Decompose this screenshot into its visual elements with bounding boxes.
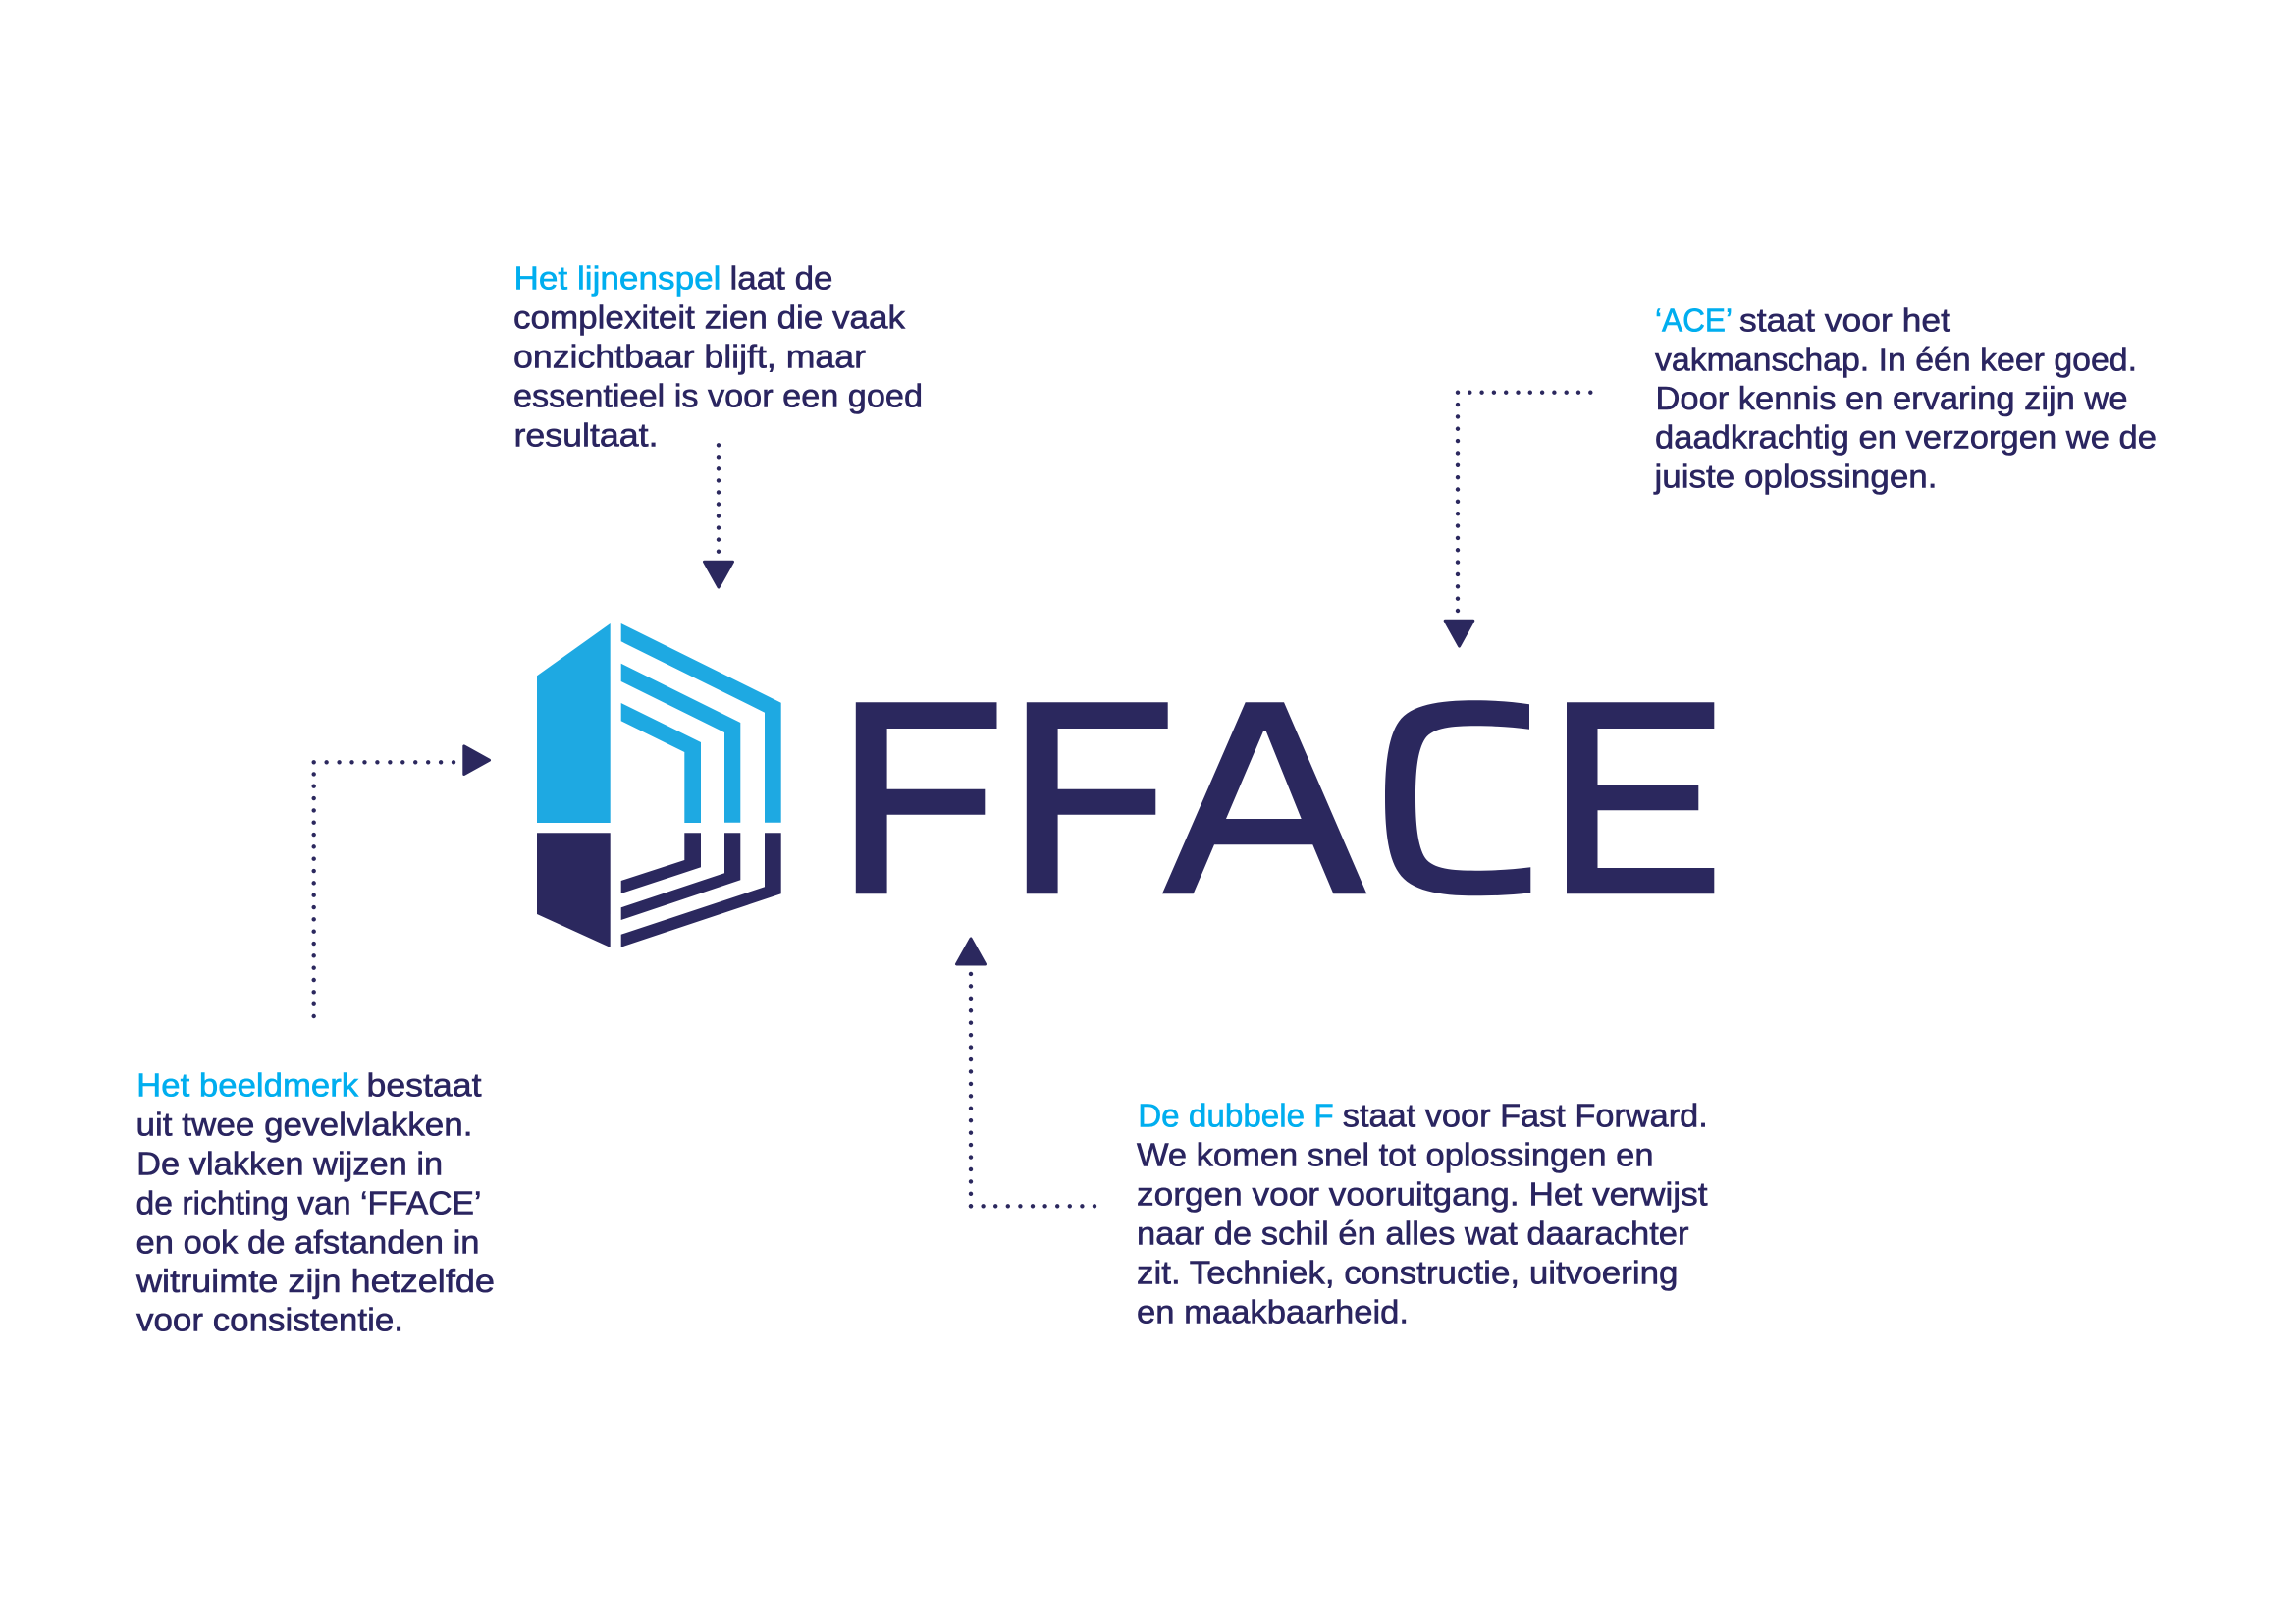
text block: Het lijnenspel: onzichtbaar blijft, maar xyxy=(513,340,866,376)
letter F xyxy=(856,702,997,893)
text block: De dubbele F xyxy=(1137,1099,1708,1330)
arrow: dubbele F to wordmark xyxy=(956,939,1095,1206)
text block: Het lijnenspel: Het lijnenspel xyxy=(514,261,721,298)
light line inner xyxy=(621,703,701,823)
letter E xyxy=(1567,702,1714,893)
light line middle xyxy=(621,664,740,823)
light line outer xyxy=(621,623,781,823)
logo: FFACE xyxy=(537,623,1714,947)
arrow: ACE to wordmark xyxy=(1445,393,1590,646)
wordmark: FFACE letter shapes xyxy=(856,700,1714,895)
icon: building mark xyxy=(537,623,781,947)
text block: ACE: ‘ACE’ xyxy=(1655,302,1733,339)
dark line inner xyxy=(621,833,701,893)
text block: De dubbele F: We komen snel tot oplossingen en xyxy=(1137,1138,1653,1174)
text block: De dubbele F: naar de schil én alles wat daarachter xyxy=(1137,1217,1688,1253)
text block: De dubbele F: staat voor Fast Forward. xyxy=(1343,1099,1708,1135)
text block: ACE: juiste oplossingen. xyxy=(1653,460,1938,496)
text block: Het lijnenspel: complexiteit zien die vaak xyxy=(513,300,905,337)
text block: ACE xyxy=(1653,302,2157,496)
dark line outer xyxy=(621,833,781,947)
dark line middle xyxy=(621,833,740,920)
text block: ACE: daadkrachtig en verzorgen we de xyxy=(1655,420,2157,457)
text block: Het lijnenspel xyxy=(513,261,923,454)
text block: Het beeldmerk: witruimte zijn hetzelfde xyxy=(135,1264,495,1300)
text block: Het beeldmerk: De vlakken wijzen in xyxy=(136,1146,443,1182)
letter A xyxy=(1162,702,1366,893)
text block: Het beeldmerk: uit twee gevelvlakken. xyxy=(135,1107,473,1143)
text block: Het beeldmerk: de richting van ‘FFACE’ xyxy=(135,1185,481,1221)
text block: Het beeldmerk xyxy=(135,1067,495,1339)
text block: ACE: vakmanschap. In één keer goed. xyxy=(1655,342,2137,378)
arrow: lijnenspel to mark xyxy=(705,445,732,587)
text block: Het beeldmerk: en ook de afstanden in xyxy=(135,1224,479,1261)
text block: Het beeldmerk: voor consistentie. xyxy=(136,1303,403,1339)
text block: ACE: Door kennis en ervaring zijn we xyxy=(1655,381,2128,417)
dark facade plane xyxy=(537,833,611,947)
text block: ACE: staat voor het xyxy=(1739,302,1951,339)
text block: Het lijnenspel: essentieel is voor een goed xyxy=(513,379,923,415)
text block: De dubbele F: zorgen voor vooruitgang. Het verwijst xyxy=(1137,1177,1708,1214)
letter C xyxy=(1385,700,1530,895)
text block: Het lijnenspel: laat de xyxy=(730,261,832,298)
arrow: beeldmerk to mark xyxy=(314,746,489,1016)
text block: De dubbele F: zit. Techniek, constructie, uitvoering xyxy=(1137,1256,1679,1292)
text block: Het lijnenspel: resultaat. xyxy=(514,417,658,454)
text block: De dubbele F: en maakbaarheid. xyxy=(1137,1294,1409,1330)
text block: De dubbele F: De dubbele F xyxy=(1138,1099,1334,1135)
text block: Het beeldmerk: Het beeldmerk xyxy=(136,1067,358,1104)
text block: Het beeldmerk: bestaat xyxy=(367,1067,482,1104)
letter F second xyxy=(1027,702,1168,893)
light facade plane xyxy=(537,623,611,823)
